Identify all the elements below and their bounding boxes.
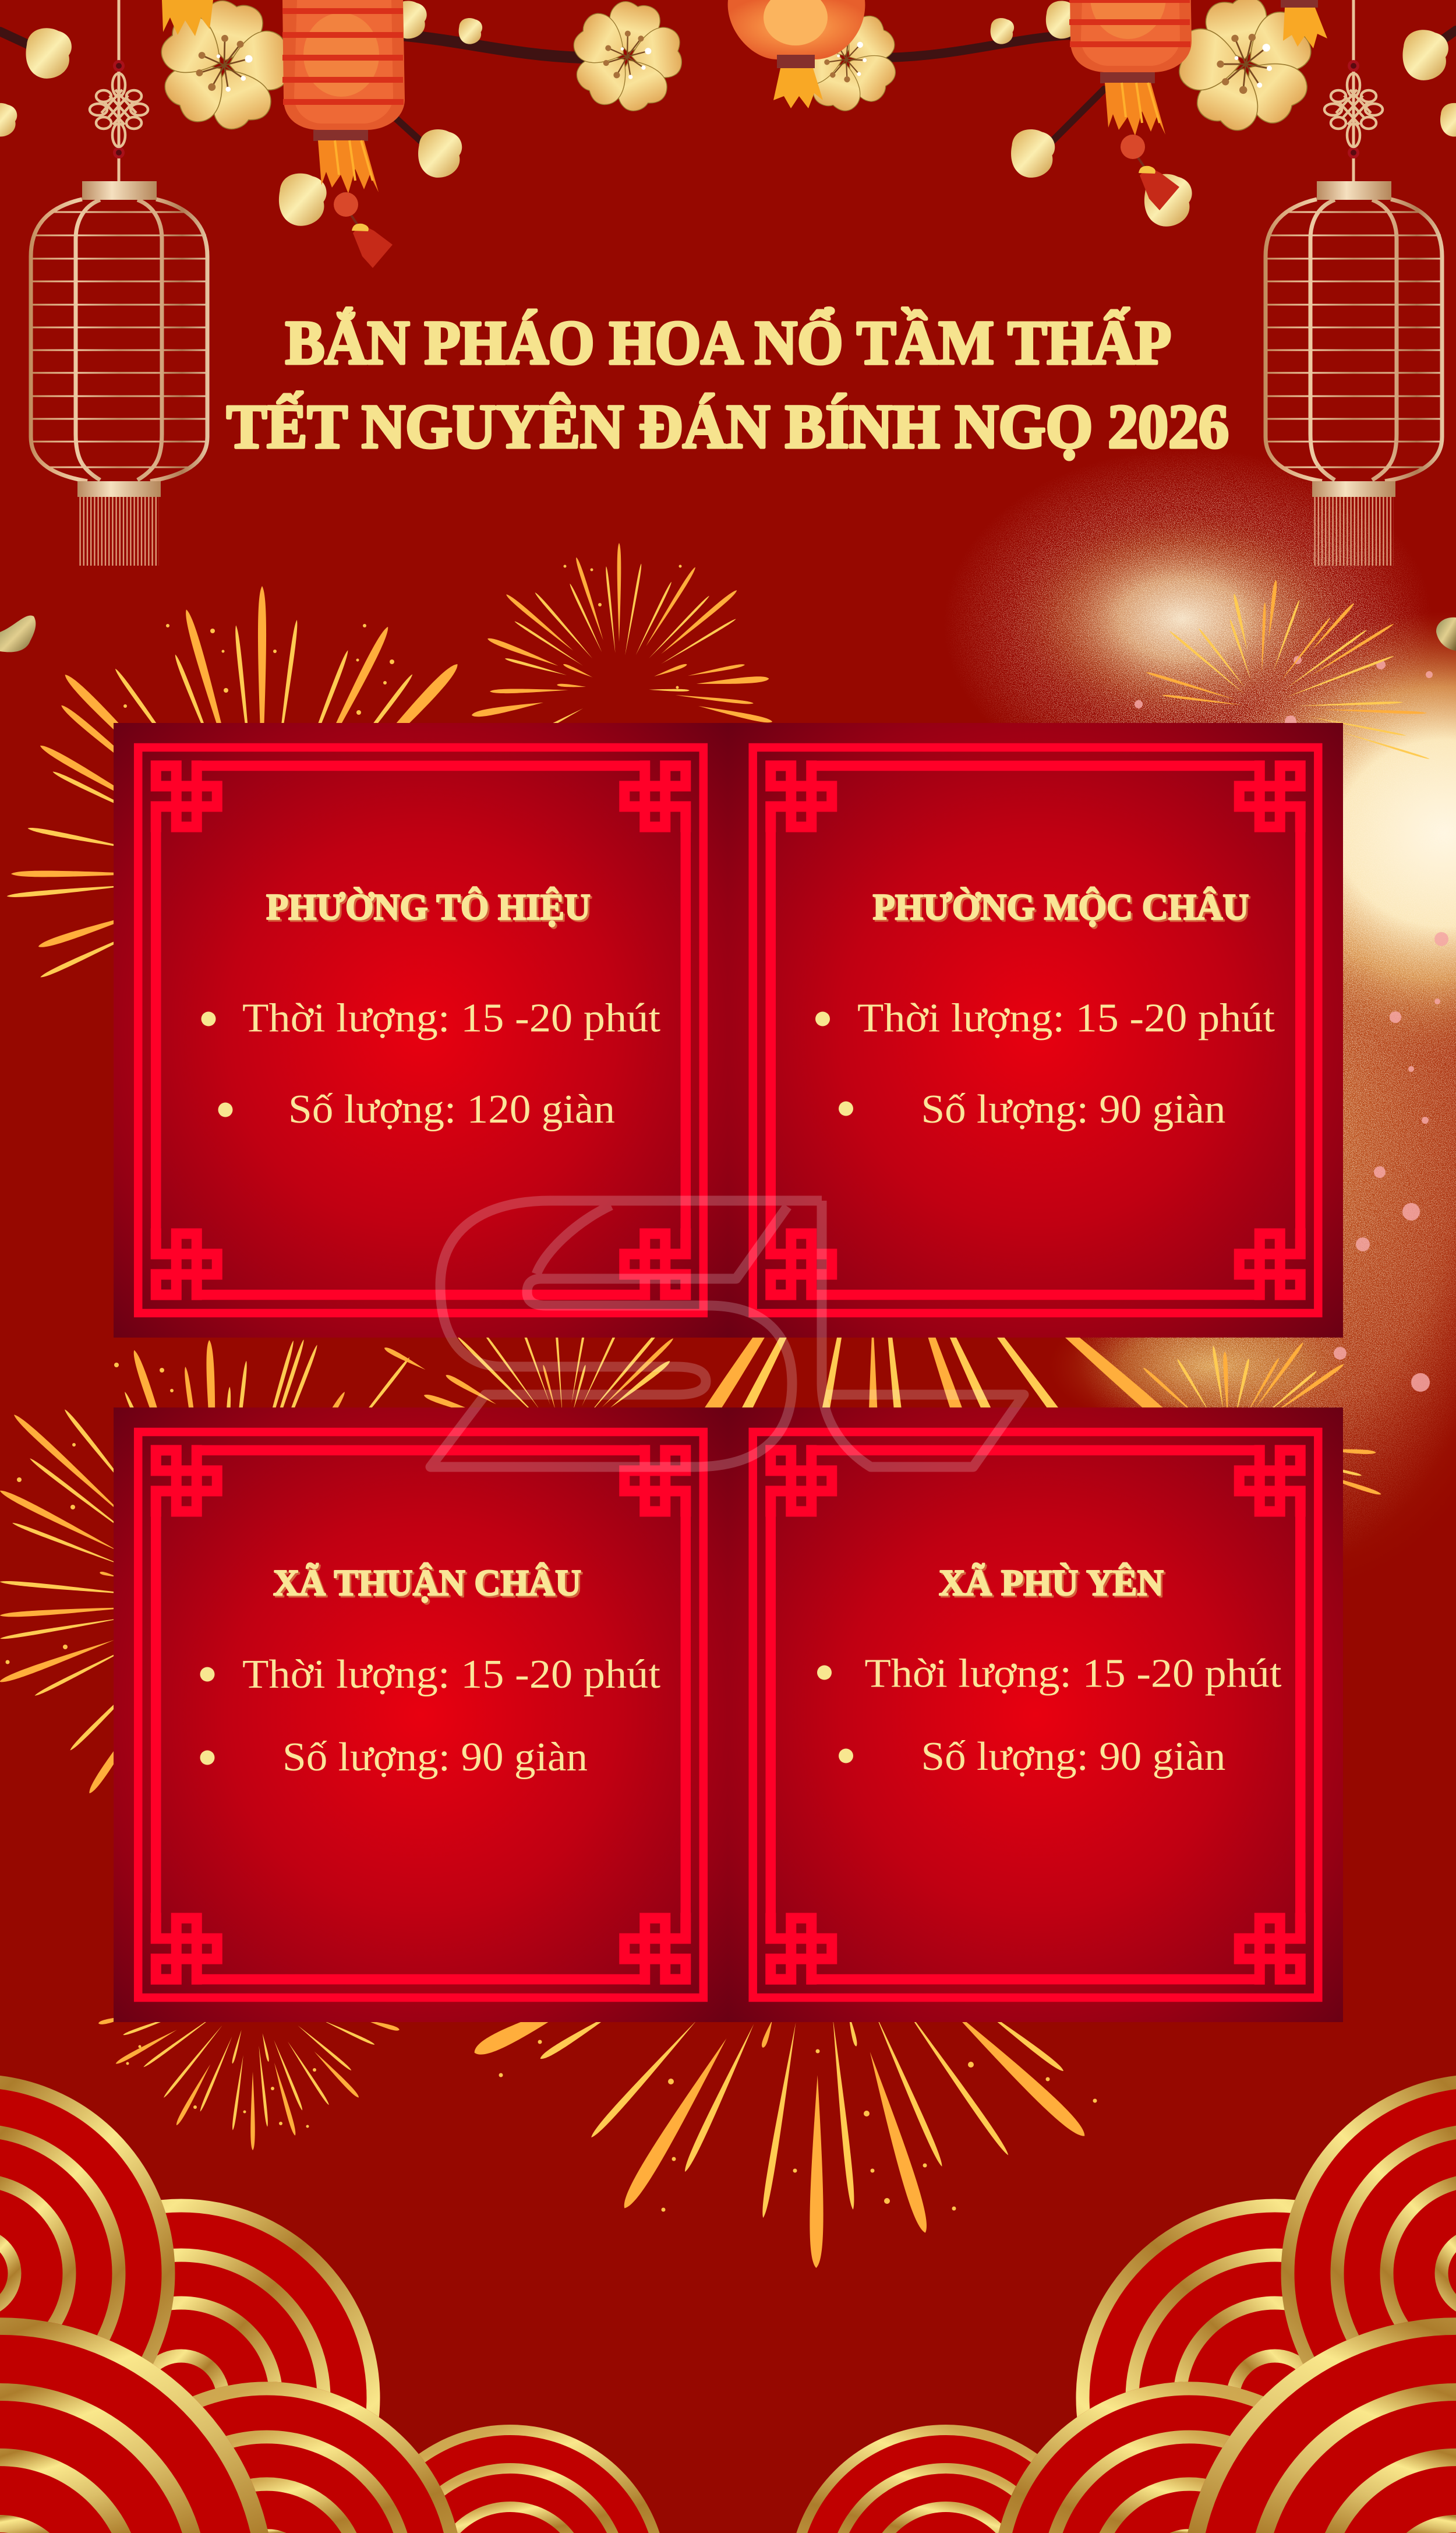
firework: gap right xyxy=(1142,1341,1382,1497)
firework: gap center xyxy=(383,1304,675,1428)
gold ingot: left xyxy=(0,615,36,652)
panel: Xã Phù Yên: XÃ PHÙ YÊN xyxy=(939,1562,1164,1603)
panel: Phường Mộc Châu xyxy=(728,723,1343,1338)
branches xyxy=(0,30,1456,145)
gold lantern: left xyxy=(31,0,207,566)
orange lantern: right xyxy=(1069,0,1192,210)
gold scallops: bottom right xyxy=(796,2081,1456,2533)
title: BẮN PHÁO HOA NỔ TẦM THẤP xyxy=(285,307,1171,378)
panel: Xã Phù Yên: Số lượng: 90 giàn xyxy=(921,1734,1225,1779)
panel: Phường Tô Hiệu: PHƯỜNG TÔ HIỆU xyxy=(266,886,591,927)
panel: Phường Tô Hiệu: Số lượng: 120 giàn xyxy=(288,1087,615,1132)
gold dust glow xyxy=(943,449,1456,1590)
orange tassel: top right xyxy=(1281,0,1327,48)
panel: Phường Tô Hiệu xyxy=(114,723,728,1338)
panel: Phường Tô Hiệu: Thời lượng: 15 -20 phút xyxy=(242,996,661,1040)
firework: top center xyxy=(471,543,773,740)
orange lantern: left xyxy=(282,0,405,268)
title: TẾT NGUYÊN ĐÁN BÍNH NGỌ 2026 xyxy=(227,391,1229,461)
title xyxy=(227,307,1229,461)
panel: Xã Thuận Châu xyxy=(114,1407,728,2022)
gold scallops: bottom left xyxy=(0,2081,660,2533)
panel: Phường Mộc Châu: PHƯỜNG MỘC CHÂU xyxy=(872,886,1249,927)
firework: bottom left small xyxy=(98,2013,400,2150)
firework: mid left xyxy=(0,1339,411,1795)
gold lantern: right xyxy=(1266,0,1442,566)
firework: gap right of center xyxy=(663,1237,1210,1536)
panel: Xã Thuận Châu: XÃ THUẬN CHÂU xyxy=(273,1562,581,1603)
gold ingot: right xyxy=(1436,618,1456,651)
panel: Xã Thuận Châu: Thời lượng: 15 -20 phút xyxy=(242,1652,661,1697)
panel: Xã Phù Yên xyxy=(728,1407,1343,2022)
panel: Xã Thuận Châu: Số lượng: 90 giàn xyxy=(282,1735,588,1780)
firework: bottom center xyxy=(471,1992,1090,2268)
orange tassel: top left xyxy=(162,0,213,36)
firework: top right xyxy=(1146,580,1430,760)
blossom buds xyxy=(0,1,1456,227)
panel: Phường Mộc Châu: Thời lượng: 15 -20 phút xyxy=(857,996,1275,1040)
panel: Phường Mộc Châu: Số lượng: 90 giàn xyxy=(921,1087,1225,1132)
pink sparkles xyxy=(1135,656,1448,1392)
round lantern: center xyxy=(728,0,865,108)
panel: Xã Phù Yên: Thời lượng: 15 -20 phút xyxy=(864,1651,1282,1696)
watermark logo outline xyxy=(430,1201,1024,1467)
firework sparks xyxy=(6,565,1097,2211)
blossom flowers xyxy=(142,0,1331,149)
firework: upper left xyxy=(6,586,462,979)
